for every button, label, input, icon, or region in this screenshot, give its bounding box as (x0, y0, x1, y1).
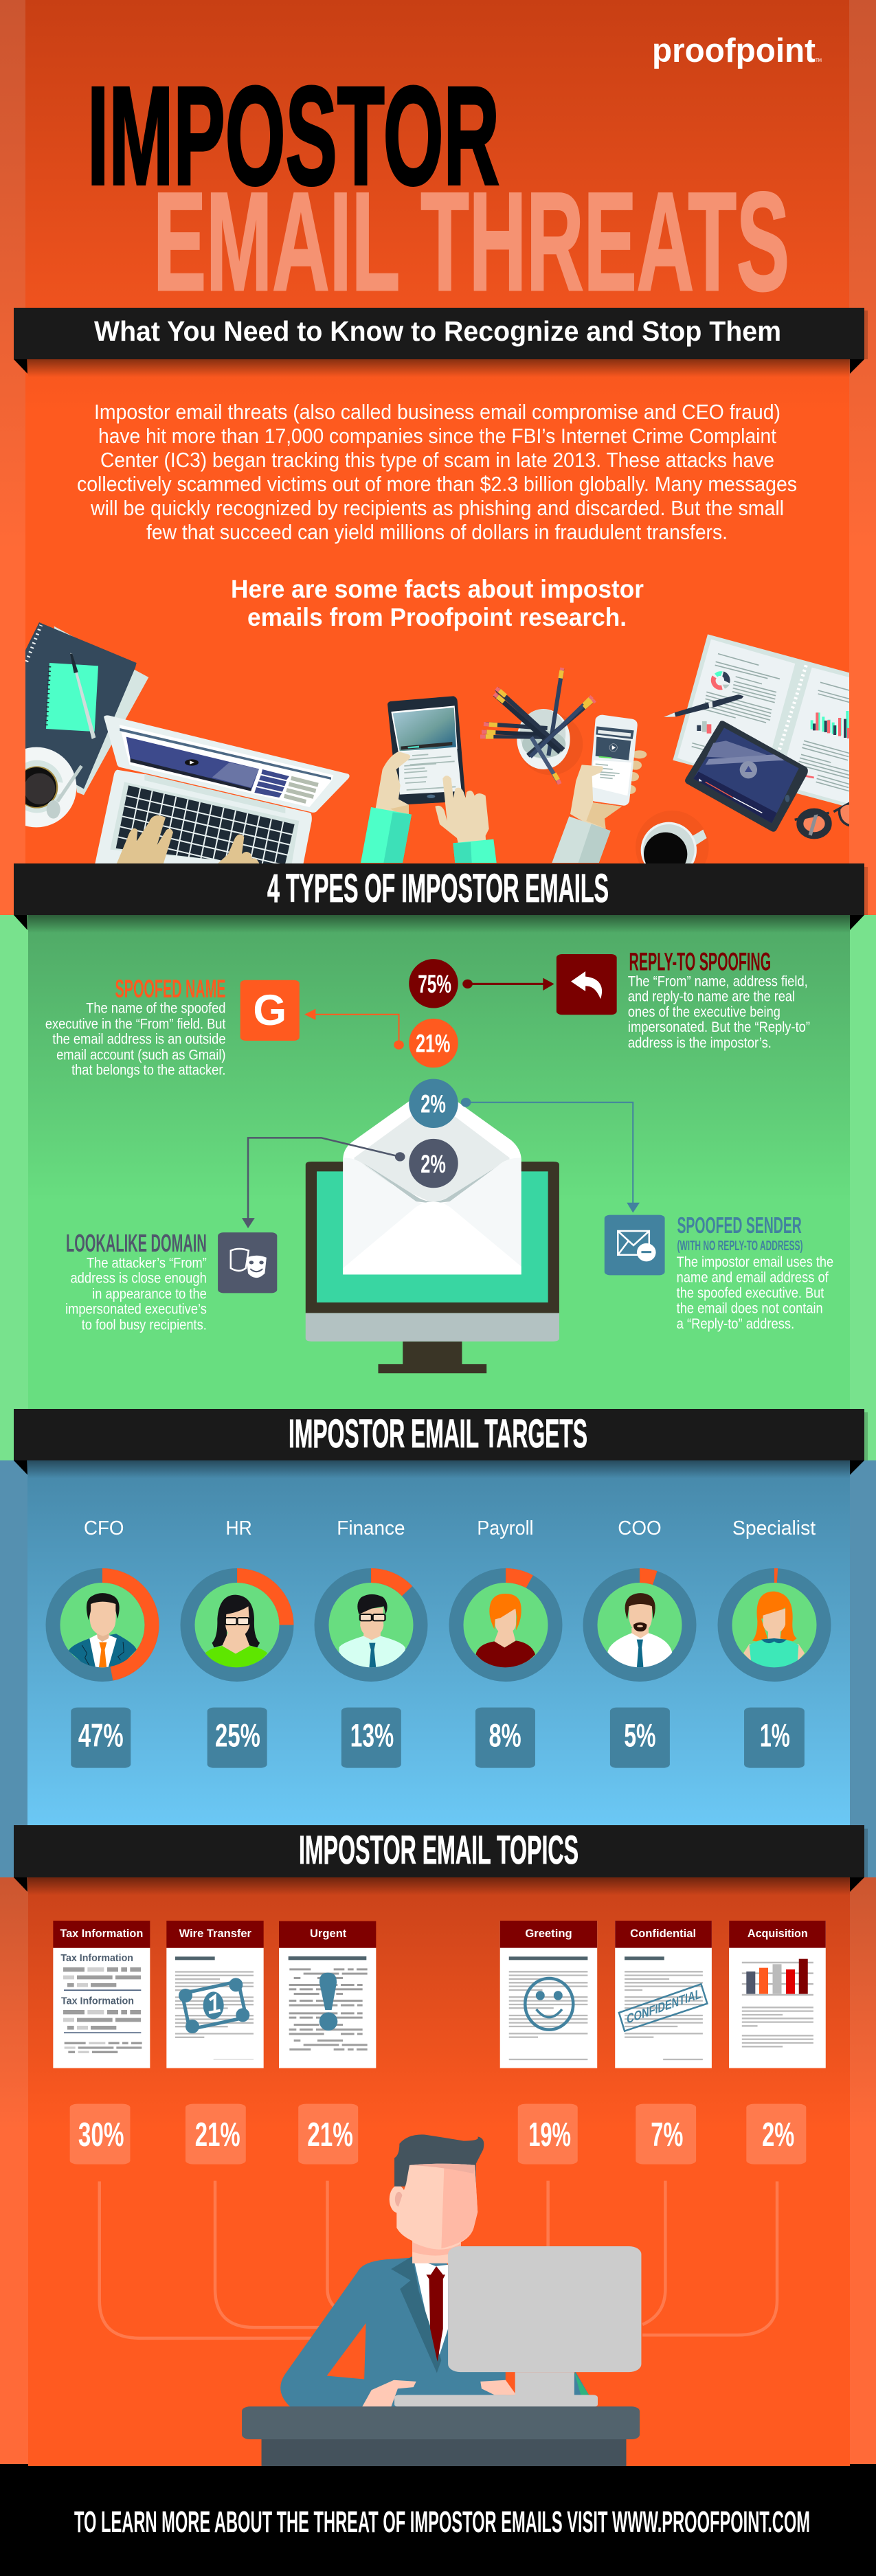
man: hands (362, 2380, 516, 2407)
panel: orange side strips (0, 0, 876, 920)
targets: labels and percentages: 1% (760, 1717, 790, 1754)
icon: letter G: G (253, 986, 287, 1035)
icon: theatre masks (218, 1232, 277, 1293)
document: Wire Transfer (166, 1921, 264, 2068)
document: Urgent (279, 1921, 376, 2068)
text block: reply-to spoofing (628, 948, 810, 1051)
diagram: email types (45, 948, 833, 1373)
percentage tiles: 21% (195, 2116, 240, 2154)
document: Tax Information (53, 1921, 150, 2068)
percentage tiles: 5% (624, 1717, 656, 1754)
panel: intro header background (25, 0, 849, 920)
banner: subtitle: What You Need to Know to Recognize and Stop Them (94, 315, 781, 347)
percentage tiles: 7% (651, 2116, 683, 2154)
document: Greeting: Greeting (525, 1927, 572, 1940)
text block: lookalike domain: address is close enough (70, 1270, 207, 1286)
icon: envelope with minus (605, 1215, 665, 1275)
icon: reply arrow (557, 954, 617, 1015)
documents: greeting, confidential, acquisition, percentages (70, 1921, 826, 2165)
text block: introduction: Center (IC3) began tracking this type of scam in late 2013. These attacks have (100, 448, 774, 472)
monitor (306, 1162, 559, 1373)
illustration: pencil cup (480, 668, 595, 784)
illustration: hands, tablet, pencils, phone (361, 668, 647, 863)
targets: labels and percentages (71, 1517, 816, 1768)
avatar: Finance (339, 1594, 405, 1669)
text block: lookalike domain: in appearance to the (92, 1286, 207, 1302)
percentage tiles: 30% (78, 2116, 124, 2154)
illustration: coffee cup right (636, 811, 709, 884)
title (87, 58, 789, 320)
banner: 4 types of impostor emails: 4 TYPES OF IMPOSTOR EMAILS (267, 866, 609, 911)
text block: lookalike domain: The attacker’s “From” (87, 1255, 207, 1271)
text block: spoofed name: the email address is an outside (52, 1031, 225, 1047)
illustration: laptop (94, 715, 350, 883)
avatars: Payroll, COO, Specialist (476, 1592, 805, 1669)
text block: introduction: collectively scammed victims out of more than $2.3 billion globally. Many messages (77, 472, 797, 496)
avatar: HR (205, 1595, 267, 1669)
title: IMPOSTOR (87, 58, 499, 214)
illustration: open report (673, 634, 861, 811)
illustration: notebook (19, 622, 148, 795)
man: head (390, 2134, 484, 2263)
text block: facts lead-in (231, 575, 644, 631)
scene: man at computer (100, 2134, 777, 2467)
avatar: Specialist (743, 1592, 805, 1669)
reply-to spoofing stat and arrow: 75% (418, 971, 451, 998)
spoofed name stat and arrow (304, 1009, 458, 1067)
ring: Specialist 1% (725, 1576, 824, 1675)
role labels: HR (225, 1517, 252, 1539)
text block: facts lead-in: Here are some facts about impostor (231, 575, 644, 603)
computer monitor back (394, 2246, 641, 2407)
panel: targets background (0, 1460, 876, 1877)
illustration: hand holding phone (552, 715, 647, 863)
document: Wire Transfer: Wire Transfer (179, 1927, 252, 1940)
illustration: desk left side (0, 622, 350, 883)
spoofed name stat and arrow: 21% (416, 1030, 450, 1058)
spoofed sender stat and arrow: 2% (420, 1090, 446, 1118)
document: Confidential (615, 1921, 712, 2068)
text block: facts lead-in: emails from Proofpoint research. (247, 603, 627, 631)
logo: proofpoint: TM (816, 58, 822, 63)
illustration: pen (664, 694, 743, 717)
document: Tax Information: Tax Information (61, 1996, 134, 2007)
text block: introduction: few that succeed can yield millions of dollars in fraudulent transfers. (146, 520, 728, 544)
banner: subtitle (14, 308, 868, 377)
chart: target rings (53, 1576, 824, 1675)
text block: spoofed name: email account (such as Gmail) (56, 1047, 225, 1063)
illustration: video tablet (685, 721, 808, 832)
avatar: Payroll (476, 1594, 535, 1669)
ring: HR 25% (188, 1576, 287, 1675)
panel: 4 types background (0, 915, 876, 1460)
document: Urgent: Urgent (310, 1927, 347, 1940)
lookalike domain stat and arrow: 2% (420, 1151, 446, 1178)
text block: spoofed sender (677, 1212, 833, 1331)
text block: spoofed name: executive in the “From” field. But (45, 1016, 226, 1032)
logo: proofpoint: proofpoint (652, 32, 816, 69)
ring: Finance 13% (322, 1576, 420, 1675)
percentage tiles: 8% (488, 1717, 521, 1754)
document: Tax Information: Tax Information (60, 1927, 143, 1940)
avatar: CFO (69, 1593, 137, 1669)
ring: COO 5% (590, 1576, 689, 1675)
text block: lookalike domain: impersonated executive’s (65, 1301, 207, 1317)
banner: impostor email topics: IMPOSTOR EMAIL TOPICS (299, 1828, 579, 1873)
envelope (343, 1092, 521, 1274)
banner: impostor email topics (14, 1825, 868, 1895)
icon: letter G (240, 980, 300, 1041)
banner: impostor email targets: IMPOSTOR EMAIL TARGETS (289, 1412, 587, 1456)
illustration: report, tablet, coffee, glasses (636, 634, 861, 884)
role labels: COO (618, 1517, 662, 1539)
percentage tiles: 47% (78, 1717, 124, 1754)
percentage tiles: 25% (215, 1717, 260, 1754)
text block: introduction (77, 400, 797, 544)
diagram: email types: SPOOFED NAME (115, 975, 225, 1004)
footer (0, 2464, 876, 2576)
role labels (84, 1517, 816, 1539)
ring: CFO 47% (53, 1576, 152, 1675)
illustration: hand holding tablet (361, 696, 497, 863)
banner: 4 types of impostor emails (14, 863, 868, 933)
text block: introduction: have hit more than 17,000 companies since the FBI’s Internet Crime Complaint (98, 424, 776, 448)
lookalike domain stat and arrow (242, 1138, 458, 1228)
text block: introduction: Impostor email threats (also called business email compromise and CEO fraud) (94, 400, 780, 424)
connector lines (100, 2181, 777, 2338)
percentage tiles: 13% (350, 1717, 394, 1754)
document: Confidential: Confidential (630, 1927, 696, 1940)
desk (242, 2406, 640, 2467)
document: Tax Information: Tax Information (60, 1953, 133, 1964)
documents: greeting, confidential, acquisition, percentages: CONFIDENTIAL (627, 1986, 701, 2027)
spoofed sender stat and arrow (409, 1079, 640, 1213)
percentage tiles (71, 1708, 805, 1768)
banner: impostor email targets (14, 1409, 868, 1478)
diagram: email types: LOOKALIKE DOMAIN (66, 1230, 207, 1257)
panel: topics background (0, 1877, 876, 2466)
man: suit (280, 2256, 589, 2407)
document: Greeting (500, 1921, 597, 2068)
role labels: CFO (84, 1517, 124, 1539)
text block: lookalike domain (65, 1230, 207, 1333)
percentage tiles (70, 2104, 806, 2165)
avatars: CFO, HR, Finance (69, 1593, 405, 1669)
percentage tiles: 19% (528, 2116, 571, 2154)
text block: spoofed name (45, 975, 226, 1078)
percentage tiles: 21% (307, 2116, 353, 2154)
reply-to spoofing stat and arrow (409, 959, 554, 1008)
ring: Payroll 8% (456, 1576, 555, 1675)
text block: introduction: will be quickly recognized by recipients as phishing and discarded. But the small (90, 496, 784, 520)
documents: tax, wire, urgent (53, 1921, 376, 2068)
avatar: COO (607, 1593, 672, 1669)
text block: lookalike domain: to fool busy recipients. (82, 1317, 207, 1333)
illustration: coffee cup left (0, 747, 82, 827)
text block: spoofed name: The name of the spoofed (86, 1000, 225, 1016)
text block: spoofed name: that belongs to the attacker. (71, 1062, 225, 1078)
role labels: Finance (337, 1517, 405, 1539)
role labels: Payroll (477, 1517, 534, 1539)
document: Acquisition (729, 1921, 826, 2068)
illustration: glasses (795, 797, 861, 836)
